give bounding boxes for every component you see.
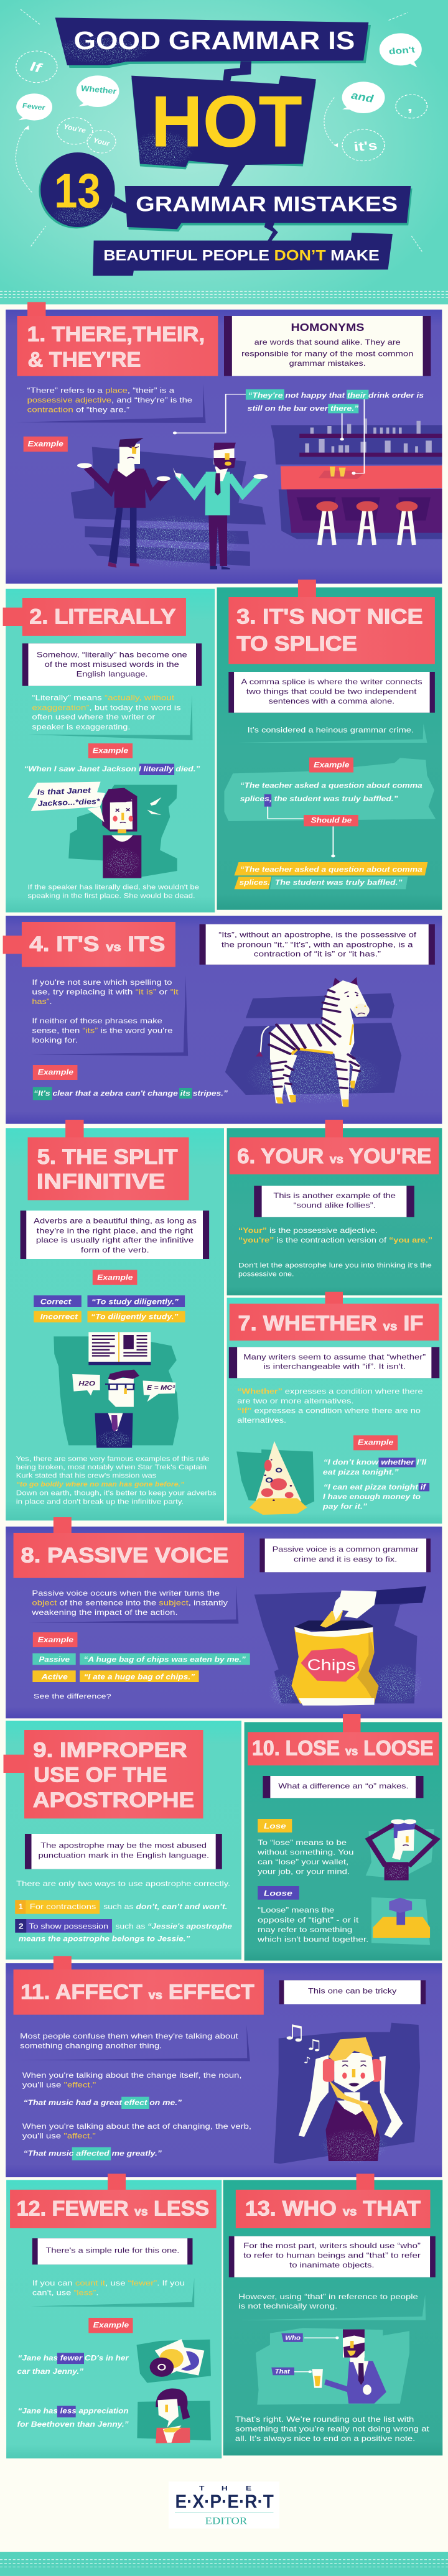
panel: 13 who vs that [223,2174,442,2455]
heading: 12. FEWER vs LESS [17,2197,209,2220]
callout: definition: they're in the right place, and the right [37,1227,194,1235]
definition text: “There” refers to a place, “their” is a [27,386,175,395]
badge: 13: 13 [54,164,101,218]
bubble words: if, you're, your, it's: it's [353,138,378,154]
illustration: pizza slice [236,1441,314,1515]
rule 1: For contractions [30,1903,96,1911]
follow-up question: See the difference? [34,1693,111,1700]
example quote with connectors [173,389,424,475]
explanation text: something changing another thing. [20,2042,162,2050]
definition: loose: opposite of “tight” - or it [258,1916,359,1925]
callout: intro [25,1834,222,1869]
callout: definition: form of the verb. [81,1246,149,1255]
example quote: “When I saw Janet Jackson I literally died.” [24,765,200,773]
example tag: Example [38,1068,73,1077]
correct and incorrect rows: “To study diligently.” [91,1298,179,1306]
heading: 11. AFFECT vs EFFECT [21,1980,254,2004]
bubble words: if, you're, your, it's: You're [62,123,87,134]
bubble: H2O [72,1374,100,1395]
rule text [30,2278,194,2307]
rule text: can't, use “less”. [32,2289,98,2297]
definition: loose: “Loose” means the [258,1907,334,1915]
explanation text: often used where the writer or [32,714,155,722]
heading: 5. THE SPLIT [37,1145,178,1168]
callout: definition: Somehow, “literally” has become one [37,651,187,659]
banner: grammar mistakes: GRAMMAR MISTAKES [136,192,398,216]
explanation text: “you're” is the contraction version of “you are.” [238,1237,432,1245]
bubble: H2O: H2O [78,1379,95,1387]
explanation text: “If” expresses a condition where there are no [237,1407,421,1415]
explanation text [238,1227,432,1278]
heading [3,922,175,967]
callout: homonyms: are words that sound alike. They are [254,338,401,346]
panel: 8 passive voice [6,1517,442,1718]
bubble: e=mc2 [143,1380,175,1402]
panel: 3 comma splice [217,580,442,910]
heading: 8. PASSIVE VOICE [21,1543,228,1567]
heading: INFINITIVE [37,1169,165,1193]
definition: lose: Lose [264,1822,286,1831]
heading [248,1714,439,1765]
heading [14,1956,264,2015]
heading [228,580,435,664]
heading: USE OF THE [34,1763,167,1787]
effect usage: you'll use "effect." [22,2081,96,2090]
explanation text: If neither of those phrases make [32,1017,162,1025]
explanation text: sense, then “its” is the word you're [32,1027,172,1035]
explanation text: object of the sentence into the subject, instantly [32,1599,228,1607]
example tag [33,1632,77,1647]
closing text: Yes, there are some very famous examples of this rule [16,1454,210,1462]
heading [230,1292,439,1341]
heading [3,598,186,636]
example tag [88,2318,133,2333]
explanation text: alternatives. [237,1416,286,1425]
callout: definition: of the most misused words in the [45,661,179,669]
plank background [224,758,436,821]
illustration: girl with headphones: ♪ [304,2055,311,2065]
speech bubble: Is that Janet [37,786,91,797]
callout: intro: What a difference an “o” makes. [278,1782,409,1790]
correct and incorrect rows: Incorrect [40,1313,78,1321]
callout: intro: is interchangeable with “if”. It isn't. [263,1363,406,1371]
heading: & THEY'RE [28,348,141,371]
illustration: beethoven [137,2388,211,2443]
corrected quote: splices. [240,879,270,887]
callout: homonyms: grammar mistakes. [289,360,366,368]
definition: lose: can “lose” your wallet, [258,1858,348,1866]
heading: 7. WHETHER vs IF [238,1311,424,1335]
example quotes: “I don’t know whether I’ll [324,1458,427,1467]
rule 1: such as [103,1903,133,1911]
lead-in text: There are only two ways to use apostrophe correctly. [16,1880,230,1888]
definition text [16,384,206,423]
bubble words: if, you're, your, it's [27,59,413,154]
definition: loose: may refer to something [258,1926,352,1934]
callout: definition: the pronoun “it.” “It's”, with an apostrophe, is a [222,941,413,949]
illustration: bearded man [173,443,268,569]
bubble words: don't, whether, fewer, and: Whether [80,84,117,96]
definition: lose: your job, or your mind. [258,1868,350,1876]
closing text [235,2415,429,2443]
callout: definition: sentences with a comma alone. [269,697,394,705]
corrected quote: The student was truly baffled.” [275,879,403,887]
explanation text: are two or more alternatives. [237,1397,353,1405]
heading [236,2174,431,2228]
definition text: possessive adjective, and “they're” is the [27,396,192,404]
effect usage: “That music had a great effect on me.” [24,2099,182,2107]
callout: intro [259,1538,431,1572]
heading [4,1730,203,1818]
passive and active rows: “I ate a huge bag of chips.” [84,1673,195,1681]
bubble words: if, you're, your, it's: If [27,59,45,76]
rule 2: means the apostrophe belongs to Jessie.” [19,1935,190,1943]
effect usage: When you're talking about the change itself, the noun, [22,2071,241,2080]
rule 2: “Jessie's apostrophe [147,1922,232,1931]
incorrect quote [240,782,422,807]
closing text: in place and don't break up the infinitive party. [16,1497,184,1505]
closing text [16,1454,217,1505]
rule text: If you can count it, use “fewer”. If you [32,2279,185,2287]
footer [0,2552,448,2576]
banner: hot [131,61,316,187]
banner: good grammar is [54,17,371,68]
callout: rule: For the most part, writers should use “who” [243,2241,421,2250]
example tag [93,1270,137,1285]
logo: the expert editor: EDITOR [205,2515,248,2526]
who label [281,2333,339,2342]
example quotes: pay for it.” [322,1503,368,1511]
callout: rule: to refer to human beings and “that” to refer [243,2251,421,2259]
callout: rule [32,2238,192,2264]
heading [28,1120,189,1200]
heading: 9. IMPROPER [33,1738,187,1762]
logo: the expert editor: E·X·P·E·R·T [175,2491,274,2512]
correct and incorrect rows: “To diligently study.” [91,1313,179,1321]
badge: 13 [39,152,129,228]
explanation text: Passive voice occurs when the writer turns the [32,1589,220,1597]
callout: homonyms [224,316,431,376]
explanation text [237,1387,423,1425]
example quotes: I have enough money to [323,1493,421,1501]
example tag [24,437,68,452]
callout: homonyms: HOMONYMS [291,322,365,333]
speech bubble: Jackso...*dies* [37,797,101,808]
example quote with connectors: still on the bar over there.” [248,404,359,413]
example: fewer [17,2353,129,2376]
note text [238,2292,426,2320]
illustration: student with book [54,1332,179,1448]
panel: 7 whether vs if [227,1292,442,1523]
rule 2: such as [116,1922,145,1931]
explanation text: “Whether” expresses a condition where there [237,1387,423,1396]
icon: dashed speech bubbles [16,51,427,161]
illustration: chip bag [254,1586,426,1706]
callout: definition [21,1211,209,1259]
explanation text: exaggeration”, but today the word is [32,704,181,712]
icon: white speech bubbles [16,33,422,121]
example quotes: “I can eat pizza tonight if [324,1483,427,1492]
passive and active rows: Active [41,1673,68,1681]
definition: loose: which isn't bound together. [257,1935,368,1944]
closing text: being broken, most notably when Star Trek's Captain [16,1463,207,1471]
explanation text [29,694,192,740]
definition: lose: without something. You [257,1849,353,1857]
callout: definition [228,672,435,713]
example tag: Example [93,2321,129,2329]
panel: 4 it's vs its [3,916,442,1124]
bubble words: don't, whether, fewer, and: don't [388,45,416,57]
logo: the expert editor: E [246,2485,251,2492]
illustration: girl with headphones: ♫ [305,2036,323,2053]
illustration: dead girl [68,785,177,878]
callout: definition: Adverbs are a beautiful thing, as long as [34,1217,197,1225]
who label: Who [285,2335,301,2341]
explanation text: weakening the impact of the action. [31,1609,178,1617]
definition: loose: Loose [264,1889,292,1898]
that label: That [275,2369,291,2375]
that label [271,2368,312,2375]
explanation text: If you're not sure which spelling to [32,979,172,987]
example tag: Example [97,1274,133,1282]
example: fewer: car than Jenny.” [17,2367,83,2376]
banner: beautiful people don't make: BEAUTIFUL PEOPLE DON’T MAKE [103,248,380,264]
example tag [33,1065,77,1080]
heading: 1. THERE,THEIR, [27,322,205,346]
callout: definition: two things that could be two independent [246,688,417,696]
speech bubble [28,782,105,822]
closing text: Kurk stated that his crew's mission was [16,1472,156,1479]
closing note: If the speaker has literally died, she wouldn't be [28,883,199,891]
bubble words: if, you're, your, it's: Your [91,136,111,147]
closing note: speaking in the first place. She would be dead. [28,891,195,900]
banner: good grammar is: GOOD GRAMMAR IS [73,27,355,55]
example: fewer: “Jane has fewer CD's in her [17,2354,129,2362]
passive and active rows [32,1653,250,1682]
panel: 6 your vs you're [227,1120,442,1295]
rule 2 [15,1919,232,1943]
example quote: “It's clear that a zebra can't change its stripes.” [34,1089,228,1098]
panel: 1 there, their, they're [6,302,442,584]
explanation text: “Literally” means “actually, without [32,694,175,702]
example: less [17,2406,129,2429]
heading [17,302,218,376]
closing text: “to go boldly where no man has gone before.” [16,1481,185,1488]
explanation text: looking for. [32,1036,78,1044]
callout: intro: This is another example of the [273,1192,396,1200]
callout: intro: Passive voice is a common grammar [273,1546,419,1554]
closing text: Down on earth, though, it's better to keep your adverbs [16,1489,217,1497]
closing note [28,883,199,900]
rule 1 [15,1900,228,1914]
callout: definition: contraction of “it is” or “it has.” [254,951,381,959]
closing text: something that you’re really not doing wrong at [235,2425,429,2433]
callout: rule: There's a simple rule for this one. [45,2246,179,2254]
example tag: Example [358,1439,393,1447]
definition: loose [257,1886,368,1944]
corrected quote [235,862,427,889]
callout: definition: place is usually right after the infinitive [36,1237,194,1245]
banner: beautiful people don't make [93,233,393,276]
rule 2: To show possession [29,1922,108,1931]
definition text: contraction of “they are.” [27,406,129,414]
passive and active rows: Passive [39,1656,70,1664]
explanation text [29,1585,238,1624]
illustration: chip bag: Chips [307,1657,356,1674]
rule 1: 1 [19,1903,23,1911]
heading: 2. LITERALLY [29,605,175,628]
logo: the expert editor: T [199,2485,205,2492]
illustration: bolt [371,1897,430,1945]
should be connector: Should be [311,817,352,825]
bubble words: if, you're, your, it's: , [407,98,413,114]
explanation text: use, try replacing it with “it is” or “it [32,988,179,997]
note text: However, using “that” in reference to people [238,2292,418,2301]
definition: lose [257,1819,353,1876]
explanation text [17,2025,250,2061]
explanation text: Don't let the apostrophe lure you into thinking it's the [238,1261,432,1269]
heading [10,2174,217,2228]
arrowheads [24,126,338,147]
panel: 10 lose vs loose [245,1714,442,1961]
callout: definition [22,643,202,686]
callout: intro: The apostrophe may be the most abused [40,1842,207,1850]
heading [230,1120,439,1174]
callout: intro: crime and it is easy to fix. [294,1555,397,1564]
note text: is not technically wrong. [238,2302,337,2310]
example quote [33,1087,228,1100]
callout: rule [229,2236,436,2277]
bubble words: don't, whether, fewer, and: and [349,90,375,105]
example tag: Example [38,1636,73,1644]
illustration: bar [271,419,442,545]
callout: intro: “sound alike follies”. [294,1202,376,1210]
callout: intro [229,1347,439,1378]
illustration: cds [136,2339,211,2383]
bubble words: don't, whether, fewer, and [22,45,416,111]
illustration: zebra [225,977,401,1107]
effect usage [22,2071,241,2109]
affect usage: When you're talking about the act of changing, the verb, [22,2123,251,2131]
incorrect quote: splices, the student was truly baffled.” [240,795,398,803]
callout: rule: to inanimate objects. [289,2261,375,2269]
callout: intro: This one can be tricky [308,1987,397,1996]
callout: definition: English language. [77,671,147,679]
example quotes: eat pizza tonight.” [323,1468,399,1477]
heading: TO SPLICE [236,631,357,655]
callout: intro: Many writers seem to assume that “whether” [243,1353,426,1362]
explanation text: Most people confuse them when they're talking about [20,2032,238,2040]
illustration: confused man [77,438,170,568]
callout: intro [254,1186,414,1217]
affect usage: you'll use "affect." [22,2132,96,2141]
panel: 11 affect vs effect [6,1956,442,2177]
example: less: “Jane has less appreciation [17,2407,129,2415]
example tag: Example [314,761,350,770]
logo: the expert editor: H [222,2485,228,2492]
rule 1: don’t, can’t and won’t. [136,1903,228,1911]
callout: intro: punctuation mark in the English language. [39,1851,209,1860]
example tag: Example [93,747,128,755]
explanation text: “Your” is the possessive adjective. [238,1227,378,1235]
passive and active rows: “A huge bag of chips was eaten by me.” [84,1656,246,1664]
closing text: That’s right. We’re rounding out the list with [235,2415,414,2424]
header [0,0,448,304]
example tag [88,743,133,758]
illustration: girl with headphones [274,2020,420,2164]
example quote [24,764,200,775]
callout: definition: “Its”, without an apostrophe, is the possessive of [218,931,417,939]
bubble: e=mc2: E = MC² [147,1384,175,1391]
illustration: girl with headphones: ♫ [281,2020,307,2045]
affect usage [22,2123,251,2160]
note text: It’s considered a heinous grammar crime. [248,726,414,735]
heading: 4. IT'S vs ITS [29,932,165,956]
should be connector [268,807,358,857]
correct and incorrect rows: Correct [40,1298,72,1306]
panel: 9 apostrophe [4,1721,241,1960]
explanation text: possessive one. [238,1270,294,1278]
logo: the expert editor [169,2481,279,2529]
illustration: man with glass [256,2328,409,2405]
example tag [309,758,353,773]
callout: definition [200,924,435,965]
explanation text: has”. [32,998,52,1006]
banner: hot: HOT [151,80,302,162]
panel: 12 fewer vs less [6,2174,222,2458]
heading: APOSTROPHE [33,1788,194,1811]
correct and incorrect rows [34,1295,185,1323]
banner: grammar mistakes [125,186,413,241]
note text [238,723,427,743]
callout: definition: A comma splice is where the writer connects [241,678,422,686]
example quotes [322,1458,429,1511]
closing text: all. It’s always nice to end on a positive note. [235,2435,415,2443]
callout: intro [263,1776,424,1798]
illustration background planks [71,447,266,566]
example tag: Example [28,440,63,449]
explanation text: speaker is exaggerating. [32,723,130,732]
affect usage: “That music affected me greatly.” [24,2150,162,2158]
rule 2: 2 [19,1922,24,1931]
panel: 2 literally [3,589,215,913]
example tag [353,1435,398,1450]
explanation text [32,975,188,1056]
callout: homonyms: responsible for many of the most common [241,350,413,358]
heading [14,1517,244,1578]
example: less: for Beethoven than Jenny.” [17,2420,129,2429]
callout: intro [279,1980,426,2004]
bubble words: don't, whether, fewer, and: Fewer [22,101,46,111]
panel: 5 split infinitive [6,1120,224,1520]
definition: lose: To “lose” means to be [258,1839,347,1847]
heading: 13. WHO vs THAT [245,2197,421,2220]
illustration: stressed man [366,1819,437,1881]
